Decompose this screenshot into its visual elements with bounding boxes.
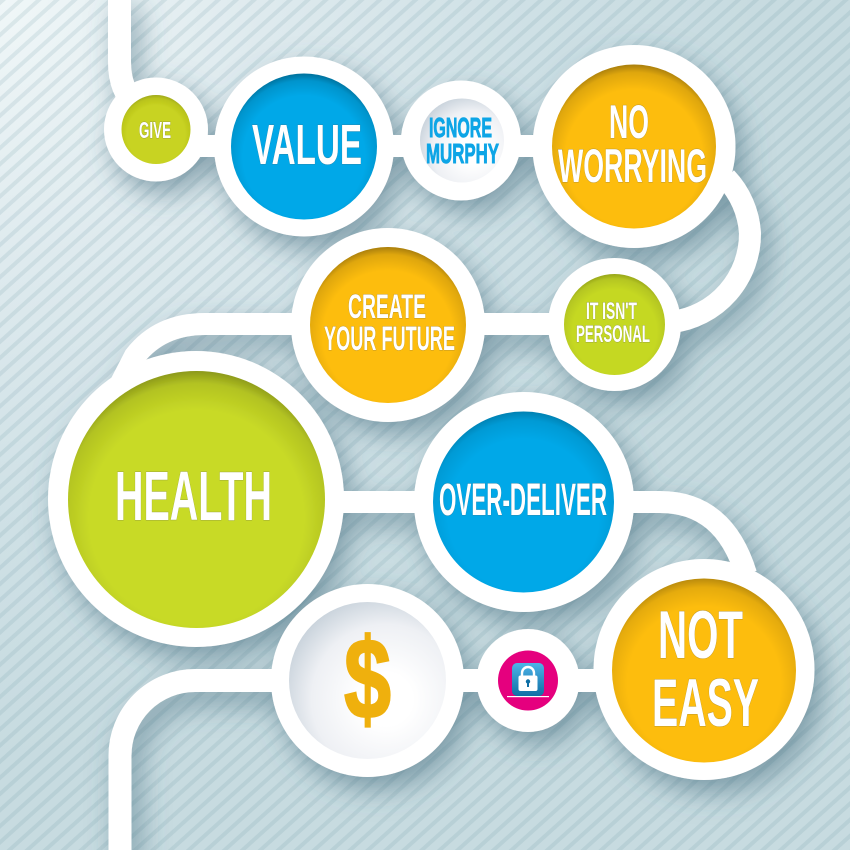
connector: it isn't personal to create your future to health (120, 324, 614, 385)
label: not easy: EASY (652, 665, 759, 741)
node: health (48, 351, 344, 647)
connector: top row (156, 135, 634, 157)
node: dollar (271, 584, 464, 777)
label: create your future: CREATE (348, 288, 426, 326)
label: it isn't personal: IT ISN'T (586, 298, 637, 325)
node: over-deliver (414, 392, 634, 612)
node: ignore murphy (401, 80, 521, 200)
connector: health to over-deliver to not easy (196, 502, 746, 574)
connector: not easy to bottom line (120, 680, 704, 850)
label: create your future: YOUR FUTURE (324, 320, 455, 358)
label: give: GIVE (139, 117, 171, 143)
label: ignore murphy: MURPHY (426, 138, 499, 169)
node: give (104, 78, 208, 182)
label: not easy: NOT (658, 597, 743, 673)
node: value (214, 56, 394, 236)
connector: no worrying to it isn't personal (672, 178, 750, 322)
label: value: VALUE (252, 113, 362, 177)
icon: dollar sign: $ (344, 616, 391, 743)
connector: top line into give (120, 0, 136, 105)
label: ignore murphy: IGNORE (429, 112, 492, 143)
icon: padlock (507, 663, 549, 697)
node: it isn't personal (548, 258, 681, 391)
label: health: HEALTH (115, 457, 272, 535)
node: lock (476, 629, 580, 732)
label: no worrying: WORRYING (558, 139, 707, 192)
node: over-deliver: OVER-DELIVER (439, 474, 607, 525)
node: not easy (594, 559, 814, 780)
label: no worrying: NO (609, 95, 649, 148)
node: create your future (291, 228, 485, 422)
node: no worrying (532, 45, 736, 248)
label: it isn't personal: PERSONAL (576, 321, 650, 348)
